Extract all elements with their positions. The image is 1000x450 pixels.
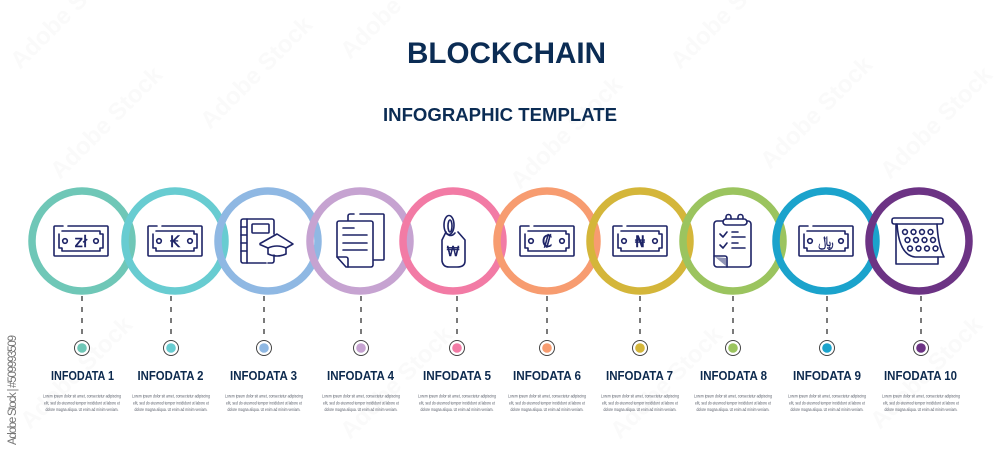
labels: INFODATA 2 bbox=[138, 368, 204, 383]
subtitle: INFOGRAPHIC TEMPLATE bbox=[383, 105, 617, 125]
description text blocks: dolore magna aliqua. Ut enim ad minim veniam. bbox=[46, 407, 118, 412]
labels: INFODATA 5 bbox=[423, 368, 491, 383]
icon: won money tag bbox=[442, 216, 465, 267]
description text blocks: elit, sed do eiusmod tempor incididunt ut labore et bbox=[602, 400, 679, 406]
icon: zloty banknote: zł bbox=[75, 232, 88, 251]
icon: won money tag: ₩ bbox=[447, 245, 460, 260]
icon: zloty banknote bbox=[54, 226, 108, 256]
description text blocks: elit, sed do eiusmod tempor incididunt ut labore et bbox=[133, 400, 210, 406]
description text blocks: Lorem ipsum dolor sit amet, consectetur adipiscing bbox=[788, 394, 867, 398]
labels: INFODATA 3 bbox=[230, 368, 297, 383]
ring row bbox=[32, 191, 969, 291]
description text blocks: Lorem ipsum dolor sit amet, consectetur adipiscing bbox=[418, 394, 497, 398]
text: Adobe Stock bbox=[875, 61, 998, 184]
description text blocks: dolore magna aliqua. Ut enim ad minim veniam. bbox=[604, 407, 676, 412]
description text blocks: dolore magna aliqua. Ut enim ad minim veniam. bbox=[420, 407, 494, 412]
icon: kip banknote bbox=[148, 226, 202, 256]
description text blocks: Lorem ipsum dolor sit amet, consectetur adipiscing bbox=[694, 394, 773, 398]
icon: checklist clipboard bbox=[714, 214, 751, 267]
description text blocks: Lorem ipsum dolor sit amet, consectetur adipiscing bbox=[882, 394, 961, 398]
labels: INFODATA 4 bbox=[327, 368, 395, 383]
icon: naira banknote bbox=[613, 226, 667, 256]
description text blocks: elit, sed do eiusmod tempor incididunt ut labore et bbox=[789, 400, 866, 406]
description text blocks: Lorem ipsum dolor sit amet, consectetur adipiscing bbox=[601, 394, 680, 398]
text: Adobe Stock bbox=[335, 321, 458, 444]
description text blocks: Lorem ipsum dolor sit amet, consectetur adipiscing bbox=[43, 394, 122, 398]
description text blocks bbox=[43, 394, 961, 412]
icon: colon banknote bbox=[520, 226, 574, 256]
description text blocks: Lorem ipsum dolor sit amet, consectetur adipiscing bbox=[132, 394, 211, 398]
text: Adobe Stock bbox=[505, 71, 628, 194]
icon: naira banknote: ₦ bbox=[635, 232, 645, 251]
marker dots bbox=[74, 340, 928, 356]
labels: INFODATA 7 bbox=[606, 368, 673, 383]
text: Adobe Stock bbox=[605, 321, 728, 444]
description text blocks: elit, sed do eiusmod tempor incididunt ut labore et bbox=[226, 400, 303, 406]
text: Adobe Stock bbox=[15, 311, 138, 434]
dashed connectors bbox=[82, 296, 921, 340]
description text blocks: dolore magna aliqua. Ut enim ad minim veniam. bbox=[696, 407, 770, 412]
description text blocks: dolore magna aliqua. Ut enim ad minim veniam. bbox=[324, 407, 398, 412]
description text blocks: elit, sed do eiusmod tempor incididunt ut labore et bbox=[695, 400, 772, 406]
title: BLOCKCHAIN bbox=[407, 37, 606, 70]
description text blocks: elit, sed do eiusmod tempor incididunt ut labore et bbox=[883, 400, 960, 406]
text: Adobe Stock bbox=[45, 61, 168, 184]
description text blocks: dolore magna aliqua. Ut enim ad minim veniam. bbox=[790, 407, 864, 412]
description text blocks: elit, sed do eiusmod tempor incididunt ut labore et bbox=[323, 400, 400, 406]
labels: INFODATA 6 bbox=[513, 368, 581, 383]
labels: INFODATA 8 bbox=[700, 368, 767, 383]
description text blocks: elit, sed do eiusmod tempor incididunt ut labore et bbox=[44, 400, 121, 406]
icon: rial banknote bbox=[799, 226, 853, 256]
icon: rial banknote: ﷼ bbox=[818, 234, 834, 250]
text: Adobe Stock bbox=[755, 51, 878, 174]
icon: kip banknote: ₭ bbox=[170, 232, 181, 251]
description text blocks: Lorem ipsum dolor sit amet, consectetur adipiscing bbox=[225, 394, 304, 398]
icon: notebook with graduation cap bbox=[241, 219, 293, 263]
labels: INFODATA 10 bbox=[884, 368, 957, 383]
icon: stacked documents bbox=[337, 214, 384, 267]
text: Adobe Stock bbox=[195, 11, 318, 134]
icon: colon banknote: ₡ bbox=[542, 232, 552, 251]
text: Adobe Stock bbox=[865, 311, 988, 434]
description text blocks: dolore magna aliqua. Ut enim ad minim veniam. bbox=[884, 407, 958, 412]
description text blocks: Lorem ipsum dolor sit amet, consectetur adipiscing bbox=[322, 394, 401, 398]
labels bbox=[51, 368, 957, 383]
description text blocks: dolore magna aliqua. Ut enim ad minim veniam. bbox=[510, 407, 584, 412]
icon: calendar page bbox=[892, 218, 944, 264]
labels: INFODATA 9 bbox=[793, 368, 861, 383]
stock id text: Adobe Stock | #509993509 bbox=[7, 335, 19, 445]
description text blocks: elit, sed do eiusmod tempor incididunt ut labore et bbox=[509, 400, 586, 406]
labels: INFODATA 1 bbox=[51, 368, 114, 383]
description text blocks: Lorem ipsum dolor sit amet, consectetur adipiscing bbox=[508, 394, 587, 398]
description text blocks: dolore magna aliqua. Ut enim ad minim veniam. bbox=[228, 407, 300, 412]
description text blocks: elit, sed do eiusmod tempor incididunt ut labore et bbox=[419, 400, 496, 406]
description text blocks: dolore magna aliqua. Ut enim ad minim veniam. bbox=[134, 407, 208, 412]
